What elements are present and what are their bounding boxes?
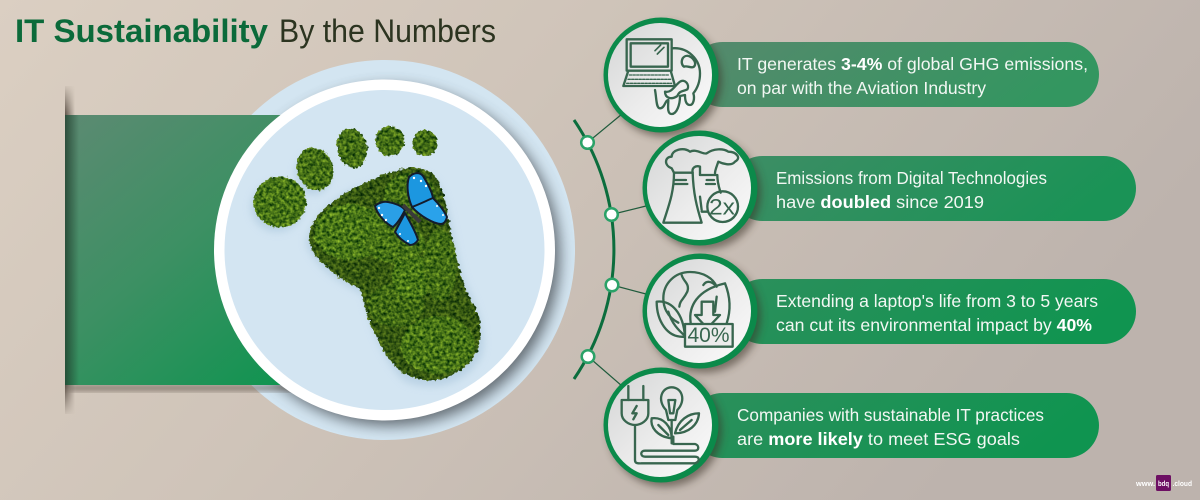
title bbox=[15, 13, 496, 49]
icon: cooling towers 2x bbox=[642, 130, 761, 250]
panel: doubled emissions pill bbox=[730, 156, 1136, 221]
white ring and photo disc bbox=[214, 80, 555, 420]
panel: doubled emissions pill: Emissions from Digital Technologies bbox=[776, 168, 1047, 188]
panel: ESG goals pill: are more likely to meet ESG goals bbox=[737, 429, 1020, 449]
butterfly bbox=[375, 173, 447, 245]
title: IT Sustainability bbox=[15, 13, 268, 49]
icon: globe leaves 40% bbox=[642, 254, 761, 373]
panel: laptop life pill: can cut its environmental impact by 40% bbox=[776, 315, 1092, 335]
title: By the Numbers bbox=[279, 13, 496, 49]
panel: doubled emissions pill: have doubled since 2019 bbox=[776, 192, 984, 212]
panel: GHG emissions pill: IT generates 3-4% of global GHG emissions, bbox=[737, 54, 1088, 74]
icon: cooling towers 2x: 2x bbox=[709, 194, 735, 220]
panel: ESG goals pill bbox=[690, 393, 1099, 458]
foot soft shadow bbox=[251, 153, 483, 386]
panel: ESG goals pill: Companies with sustainable IT practices bbox=[737, 405, 1044, 425]
logo: www. bbox=[1135, 481, 1155, 488]
icon: globe leaves 40%: 40% bbox=[688, 324, 730, 347]
panel: laptop life pill bbox=[730, 279, 1136, 344]
logo: .cloud bbox=[1172, 481, 1192, 488]
panel: laptop life pill: Extending a laptop's life from 3 to 5 years bbox=[776, 291, 1098, 311]
icon: plug bulb plant bbox=[604, 368, 722, 487]
icon: laptop and melting globe bbox=[604, 18, 722, 137]
pale outer circle bbox=[252, 60, 575, 440]
logo bbox=[1135, 475, 1192, 491]
green ribbon band bbox=[65, 86, 305, 414]
footprint photo: moss foot with butterfly bbox=[251, 125, 483, 386]
logo: bdq bbox=[1158, 481, 1169, 488]
timeline arc bbox=[574, 114, 646, 386]
panel: GHG emissions pill bbox=[690, 42, 1099, 107]
panel: GHG emissions pill: on par with the Aviation Industry bbox=[737, 78, 986, 98]
moss toes and sole bbox=[254, 125, 480, 381]
